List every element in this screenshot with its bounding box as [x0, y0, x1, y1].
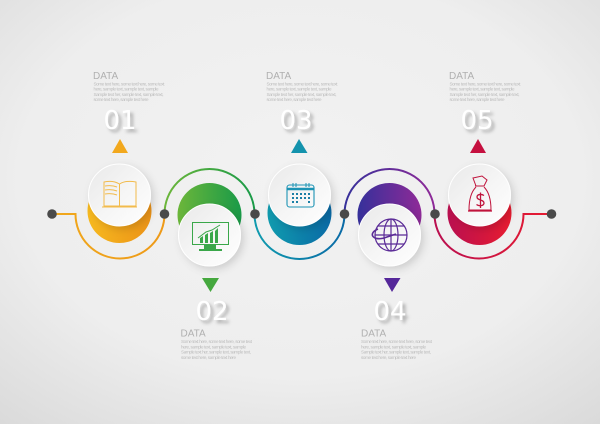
- text block 5: Sample text her, sample text, sample text,: [450, 92, 520, 97]
- icon: calendar: [287, 183, 314, 207]
- text block 2: Some text here, some text here, some text: [181, 339, 253, 344]
- text block 2: here, sample text, sample text, sample: [181, 344, 246, 350]
- number 05: 05: [460, 106, 494, 136]
- text block 5: DATA: [449, 71, 475, 82]
- icon: globe: [372, 219, 407, 251]
- connector line: [52, 169, 551, 259]
- step 4 disc: [358, 204, 420, 266]
- icon: open book: [102, 181, 137, 207]
- number 02: 02: [195, 297, 229, 327]
- text block 1: here, sample text, sample text, sample: [94, 86, 159, 92]
- text block 1: DATA: [93, 71, 119, 82]
- triangle 1: [112, 139, 128, 153]
- text block 4: Sample text her, sample text, sample text,: [361, 350, 431, 354]
- text block 4: here, sample text, sample text, sample: [361, 344, 426, 350]
- text block 3: here, sample text, sample text, sample: [266, 86, 332, 92]
- triangle 4: [384, 278, 400, 292]
- text block 3: some text here, sample text here: [266, 97, 322, 102]
- text block 4: [361, 328, 433, 360]
- text block 1: [93, 71, 165, 102]
- text block 4: some text here, sample text here: [361, 355, 416, 360]
- text block 3: DATA: [266, 71, 292, 82]
- text block 1: some text here, sample text here: [94, 97, 149, 102]
- text block 5: [449, 71, 521, 102]
- text block 4: DATA: [361, 328, 387, 340]
- text block 4: Some text here, some text here, some text: [361, 339, 433, 344]
- text block 5: some text here, sample text here: [450, 97, 505, 102]
- colored half discs: [88, 179, 512, 247]
- text block 2: DATA: [180, 328, 206, 340]
- triangle 3: [291, 139, 308, 153]
- text block 1: Some text here, some text here, some text: [94, 82, 165, 86]
- connector nodes: [47, 209, 556, 219]
- triangle 2: [202, 278, 219, 292]
- triangle 5: [470, 139, 486, 153]
- step 3 disc: [268, 164, 330, 226]
- text block 3: Sample text her, sample text, sample text,: [266, 92, 336, 97]
- icon: monitor with chart: [192, 222, 228, 251]
- number 01: 01: [103, 106, 137, 136]
- icon: money bag: [468, 176, 492, 211]
- text block 2: some text here, sample text here: [181, 355, 236, 360]
- text block 2: Sample text her, sample text, sample text,: [181, 350, 251, 354]
- step 1 disc: [88, 164, 150, 226]
- text block 3: Some text here, some text here, some text: [266, 82, 338, 86]
- text block 5: here, sample text, sample text, sample: [450, 86, 515, 92]
- text block 5: Some text here, some text here, some text: [450, 82, 521, 86]
- number 04: 04: [373, 297, 407, 327]
- step 5 disc: [448, 164, 510, 226]
- step 2 disc: [178, 204, 240, 266]
- text block 2: [180, 328, 253, 360]
- number 03: 03: [279, 106, 313, 136]
- text block 3: [266, 71, 338, 102]
- text block 1: Sample text her, sample text, sample text,: [94, 92, 164, 97]
